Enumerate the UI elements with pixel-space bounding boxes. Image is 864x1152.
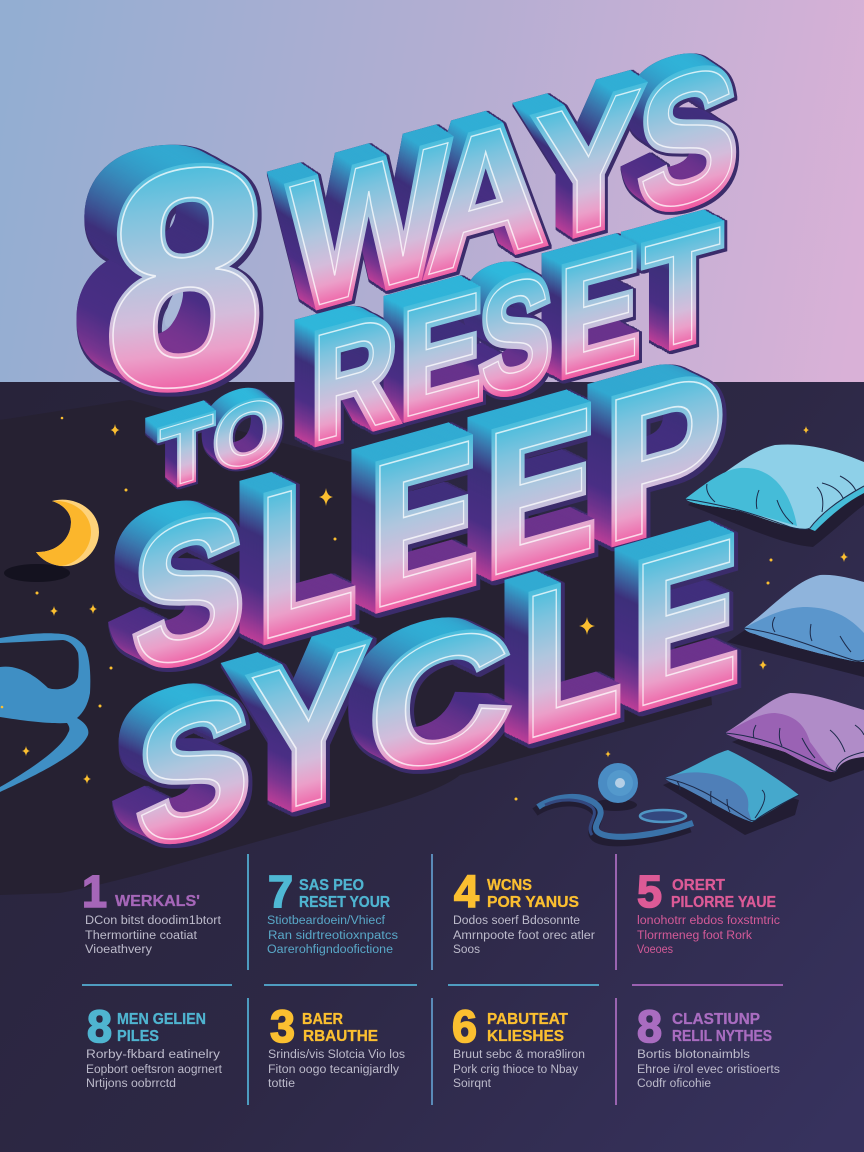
title word: SLEEP: P — [604, 325, 724, 588]
panel: item 8 blue: PILES — [117, 1028, 159, 1045]
panel: item 8 purple — [637, 1001, 780, 1090]
title numeral: 8: 8 — [100, 94, 271, 460]
panel: item 4: Amrnpoote foot orec atler — [453, 930, 595, 942]
panel: item 6: PABUTEAT — [487, 1011, 568, 1028]
info grid dividers — [82, 854, 783, 1105]
panel: item 1: WERKALS' — [115, 893, 200, 910]
title word: SLEEP: L — [257, 428, 356, 685]
title word: SLEEP: E — [369, 394, 478, 654]
title word: SYCLE: Y — [250, 600, 368, 864]
panel: item 3: Srindis/vis Slotcia Vio los — [268, 1049, 405, 1061]
panel: item 6: Soirqnt — [453, 1078, 492, 1090]
panel: item 3: BAER — [302, 1011, 343, 1028]
panel: item 4: Soos — [453, 944, 480, 956]
title word: SLEEP: L — [257, 428, 356, 685]
panel: item 5: 5 — [637, 866, 662, 917]
title word: SYCLE: L — [522, 526, 621, 784]
panel: item 3: RBAUTHE — [303, 1028, 378, 1045]
title word: TO: O — [213, 375, 283, 493]
panel: item 3 — [268, 1001, 405, 1090]
title word: TO: T — [159, 396, 214, 509]
title word: WAYS: Y — [534, 50, 643, 284]
panel: item 7: RESET YOUR — [299, 894, 390, 911]
title word: SYCLE: Y — [250, 600, 368, 864]
title word: SLEEP: E — [369, 394, 478, 654]
title word: TO — [159, 375, 283, 509]
panel: item 8 blue: Nrtijons oobrrctd — [86, 1078, 176, 1090]
title word: WAYS: W — [290, 103, 448, 352]
panel: item 8 blue: MEN GELIEN — [117, 1011, 206, 1028]
title word: WAYS: A — [424, 77, 547, 315]
title word: SLEEP: S — [133, 466, 244, 715]
title word: SYCLE — [137, 492, 739, 890]
panel: item 5: Tlorrmeneg foot Rork — [637, 930, 752, 942]
title word: SYCLE: E — [632, 492, 739, 752]
title word: SYCLE: C — [369, 582, 512, 819]
title word: SYCLE: S — [137, 651, 251, 890]
title word: WAYS — [290, 22, 738, 352]
panel: item 6: KLIESHES — [487, 1028, 564, 1045]
panel: item 4: POR YANUS — [487, 894, 579, 911]
title word: SYCLE: C — [369, 582, 512, 819]
panel: item 7: SAS PEO — [299, 877, 364, 894]
cast shadow under the title — [0, 400, 712, 895]
panel: item 5: Voeoes — [637, 944, 673, 956]
title word: WAYS: S — [639, 22, 738, 254]
title word: SLEEP: S — [133, 466, 244, 715]
panel: item 8 purple: Bortis blotonaimbls — [637, 1049, 750, 1061]
title word: RESET: E — [400, 259, 483, 452]
icon: sleep mask — [0, 633, 90, 792]
panel: item 8 blue: Eopbort oeftsron aogrnert — [86, 1064, 223, 1076]
background: dark floor — [0, 382, 864, 1152]
panel: item 5: PILORRE YAUE — [671, 894, 776, 911]
title word: TO: T — [159, 396, 214, 509]
title word: WAYS: W — [290, 103, 448, 352]
panel: item 5: lonohotrr ebdos foxstmtric — [637, 915, 780, 927]
title word: RESET: R — [311, 283, 397, 476]
title word: SYCLE: C — [369, 582, 512, 819]
background: pastel sky — [0, 0, 864, 383]
title word: WAYS: A — [424, 77, 547, 315]
title word: SLEEP: L — [257, 428, 356, 685]
title word: RESET: E — [400, 259, 483, 452]
title word: SLEEP — [133, 325, 724, 715]
panel: item 1: Vioeathvery — [85, 944, 152, 956]
title word: SYCLE: L — [522, 526, 621, 784]
panel: item 8 purple: Ehroe i/rol evec oristioerts — [637, 1064, 780, 1076]
title word: RESET: T — [644, 194, 721, 386]
panel: item 4: WCNS — [487, 877, 532, 894]
panel: item 4: 4 — [454, 866, 479, 917]
panel: item 8 purple: 8 — [637, 1001, 662, 1052]
title word: RESET: R — [311, 283, 397, 476]
title word: RESET: E — [558, 216, 639, 409]
panel: item 8 blue: Rorby-fkbard eatinelry — [86, 1049, 220, 1061]
icon: cyan pillow — [685, 444, 864, 547]
title word: SLEEP: E — [485, 362, 596, 622]
title word: SLEEP: E — [369, 394, 478, 654]
panel: item 8 purple: CLASTIUNP — [672, 1011, 760, 1028]
icon: purple pillow — [725, 693, 864, 782]
title: 8 Ways to Reset Sleep Sycle — [100, 22, 739, 890]
title word: WAYS: A — [424, 77, 547, 315]
panel: item 6: Bruut sebc & mora9liron — [453, 1049, 585, 1061]
panel: item 7: 7 — [268, 866, 293, 917]
title word: RESET: E — [558, 216, 639, 409]
panel: item 7: Ran sidrtreotioxnpatcs — [268, 930, 398, 942]
title word: SLEEP: P — [604, 325, 724, 588]
title word: WAYS: W — [290, 103, 448, 352]
panel: item 8 purple: RELIL NYTHES — [672, 1028, 772, 1045]
panel: item 3: 3 — [270, 1001, 295, 1052]
title numeral: 8: 8 — [100, 94, 271, 460]
panel: item 3: Fiton oogo tecanigjardly — [268, 1064, 399, 1076]
panel: item 8 blue: 8 — [87, 1001, 112, 1052]
title word: WAYS: Y — [534, 50, 643, 284]
title word: TO: O — [213, 375, 283, 493]
title word: RESET: R — [311, 283, 397, 476]
icon: glowing orb — [593, 763, 638, 811]
title word: SYCLE: Y — [250, 600, 368, 864]
title word: RESET: E — [400, 259, 483, 452]
panel: item 1 — [82, 866, 222, 956]
title word: SYCLE: S — [137, 651, 251, 890]
panel: item 1: Thermortiine coatiat — [85, 930, 198, 942]
panel: item 6 — [452, 1001, 585, 1090]
title word: RESET: S — [480, 240, 551, 430]
title word: TO: T — [159, 396, 214, 509]
panel: item 1: DCon bitst doodim1btort — [85, 915, 222, 927]
title word: RESET: T — [644, 194, 721, 386]
panel: item 3: tottie — [268, 1078, 295, 1090]
panel: item 4 — [453, 866, 595, 956]
panel: item 7 — [267, 866, 398, 956]
panel: item 5: ORERT — [672, 877, 725, 894]
title word: RESET: S — [480, 240, 551, 430]
title word: SLEEP: E — [485, 362, 596, 622]
icon: teal pillow — [663, 750, 799, 835]
title word: SYCLE: E — [632, 492, 739, 752]
title word: SYCLE: S — [137, 651, 251, 890]
title word: SLEEP: E — [485, 362, 596, 622]
title word: SLEEP: P — [604, 325, 724, 588]
icon: blue pillow — [727, 575, 864, 677]
title word: WAYS: Y — [534, 50, 643, 284]
panel: item 7: Stiotbeardoein/Vhiecf — [267, 915, 386, 927]
panel: item 4: Dodos soerf Bdosonnte — [453, 915, 580, 927]
title numeral: 8: 8 — [100, 94, 271, 460]
panel: item 6: 6 — [452, 1001, 477, 1052]
panel: item 1: 1 — [82, 866, 107, 917]
title word: RESET: S — [480, 240, 551, 430]
title word: WAYS: S — [639, 22, 738, 254]
title word: RESET — [311, 194, 721, 476]
title word: SYCLE: E — [632, 492, 739, 752]
panel: item 5 — [637, 866, 780, 956]
decorative sparkles and dots — [1, 417, 848, 800]
title word: RESET: T — [644, 194, 721, 386]
panel: item 6: Pork crig thioce to Nbay — [453, 1064, 578, 1076]
title word: SLEEP: S — [133, 466, 244, 715]
icon: crescent moon — [4, 500, 99, 582]
panel: item 7: Oarerohfigndoofictione — [267, 944, 393, 956]
title word: RESET: E — [558, 216, 639, 409]
icon: swirling ribbon — [535, 797, 693, 842]
title word: WAYS: S — [639, 22, 738, 254]
title word: TO: O — [213, 375, 283, 493]
title word: SYCLE: L — [522, 526, 621, 784]
panel: item 8 purple: Codfr oficohie — [637, 1078, 711, 1090]
panel: item 8 blue — [86, 1001, 223, 1090]
